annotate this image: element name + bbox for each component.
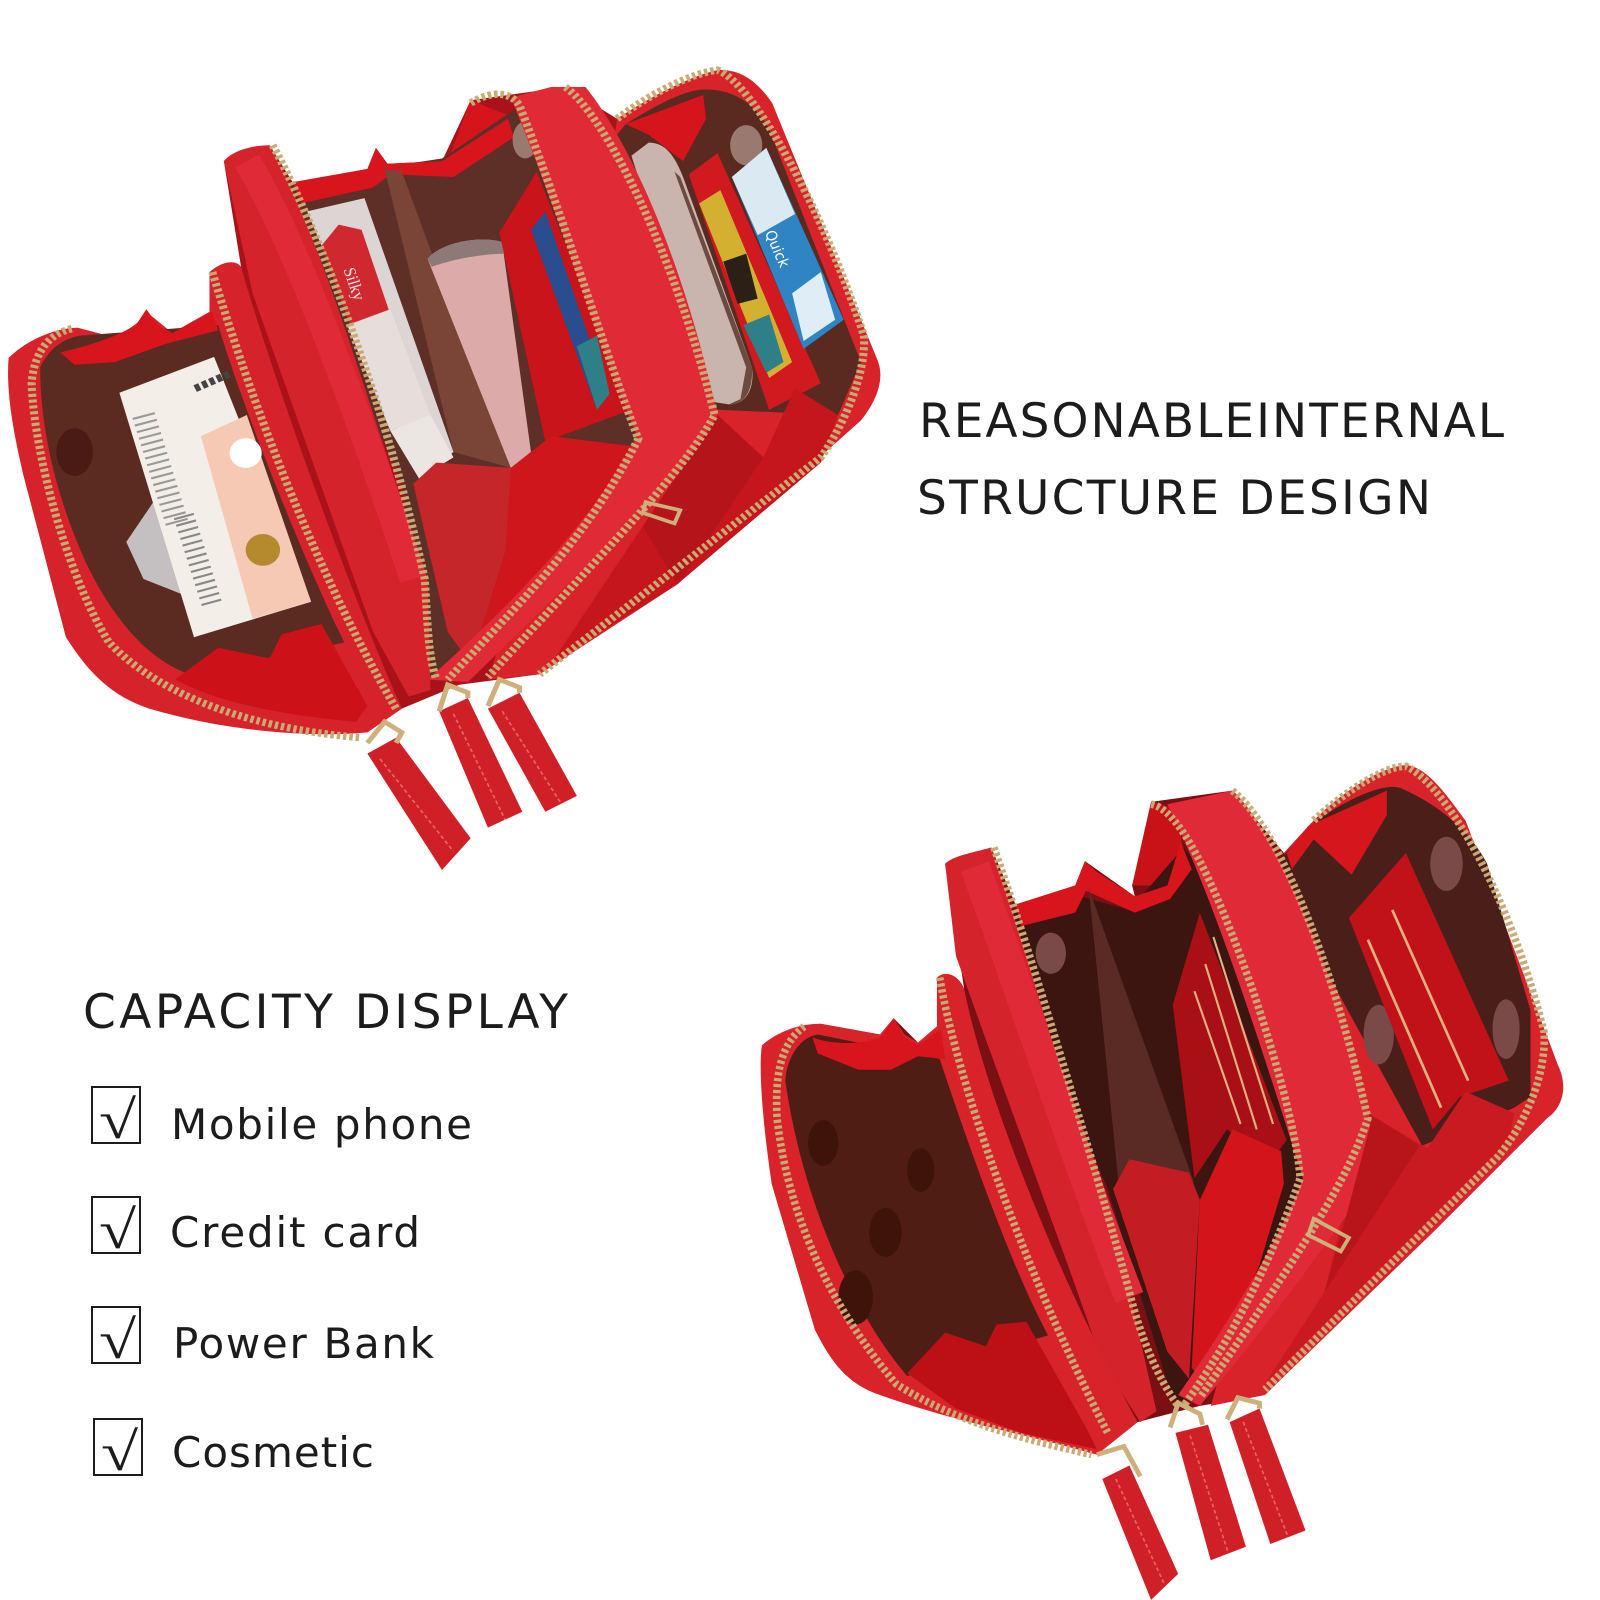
item: cosmetic: Cosmetic [172, 1428, 374, 1477]
checklist [92, 1087, 472, 1482]
item: mobile phone: Mobile phone [171, 1100, 472, 1149]
item: mobile phone [92, 1087, 472, 1150]
item: cosmetic: √ [101, 1423, 139, 1482]
card label: Quick [761, 228, 792, 271]
right compartment [1211, 765, 1563, 1406]
heading: internal structure: REASONABLEINTERNAL [919, 394, 1504, 449]
item: cosmetic [94, 1419, 374, 1482]
product photo: open bag with contents [8, 70, 880, 870]
heading: internal structure [917, 394, 1504, 526]
item: power bank [92, 1307, 435, 1370]
item: credit card [92, 1197, 420, 1260]
middle compartment with cosmetics [224, 87, 718, 696]
left compartment with tissue pack [8, 262, 402, 738]
item: power bank: √ [99, 1311, 137, 1370]
middle compartment [945, 791, 1371, 1422]
item: credit card: Credit card [170, 1208, 420, 1257]
left compartment [761, 974, 1138, 1455]
heading: internal structure: STRUCTURE DESIGN [917, 471, 1431, 526]
D-ring [643, 502, 680, 523]
zipper pull tabs [367, 680, 577, 870]
item: mobile phone: √ [99, 1091, 137, 1150]
product photo: empty open bag [761, 765, 1563, 1600]
bag silhouette base [9, 70, 878, 732]
D-ring [1308, 1219, 1349, 1251]
bag silhouette base [762, 765, 1558, 1455]
heading: capacity display: CAPACITY DISPLAY [83, 985, 568, 1040]
zipper pull tabs [1097, 1398, 1306, 1600]
item: power bank: Power Bank [173, 1319, 435, 1368]
right compartment with cards and phone [488, 70, 880, 680]
lipstick label: Silky [339, 265, 370, 303]
item: credit card: √ [99, 1201, 137, 1260]
